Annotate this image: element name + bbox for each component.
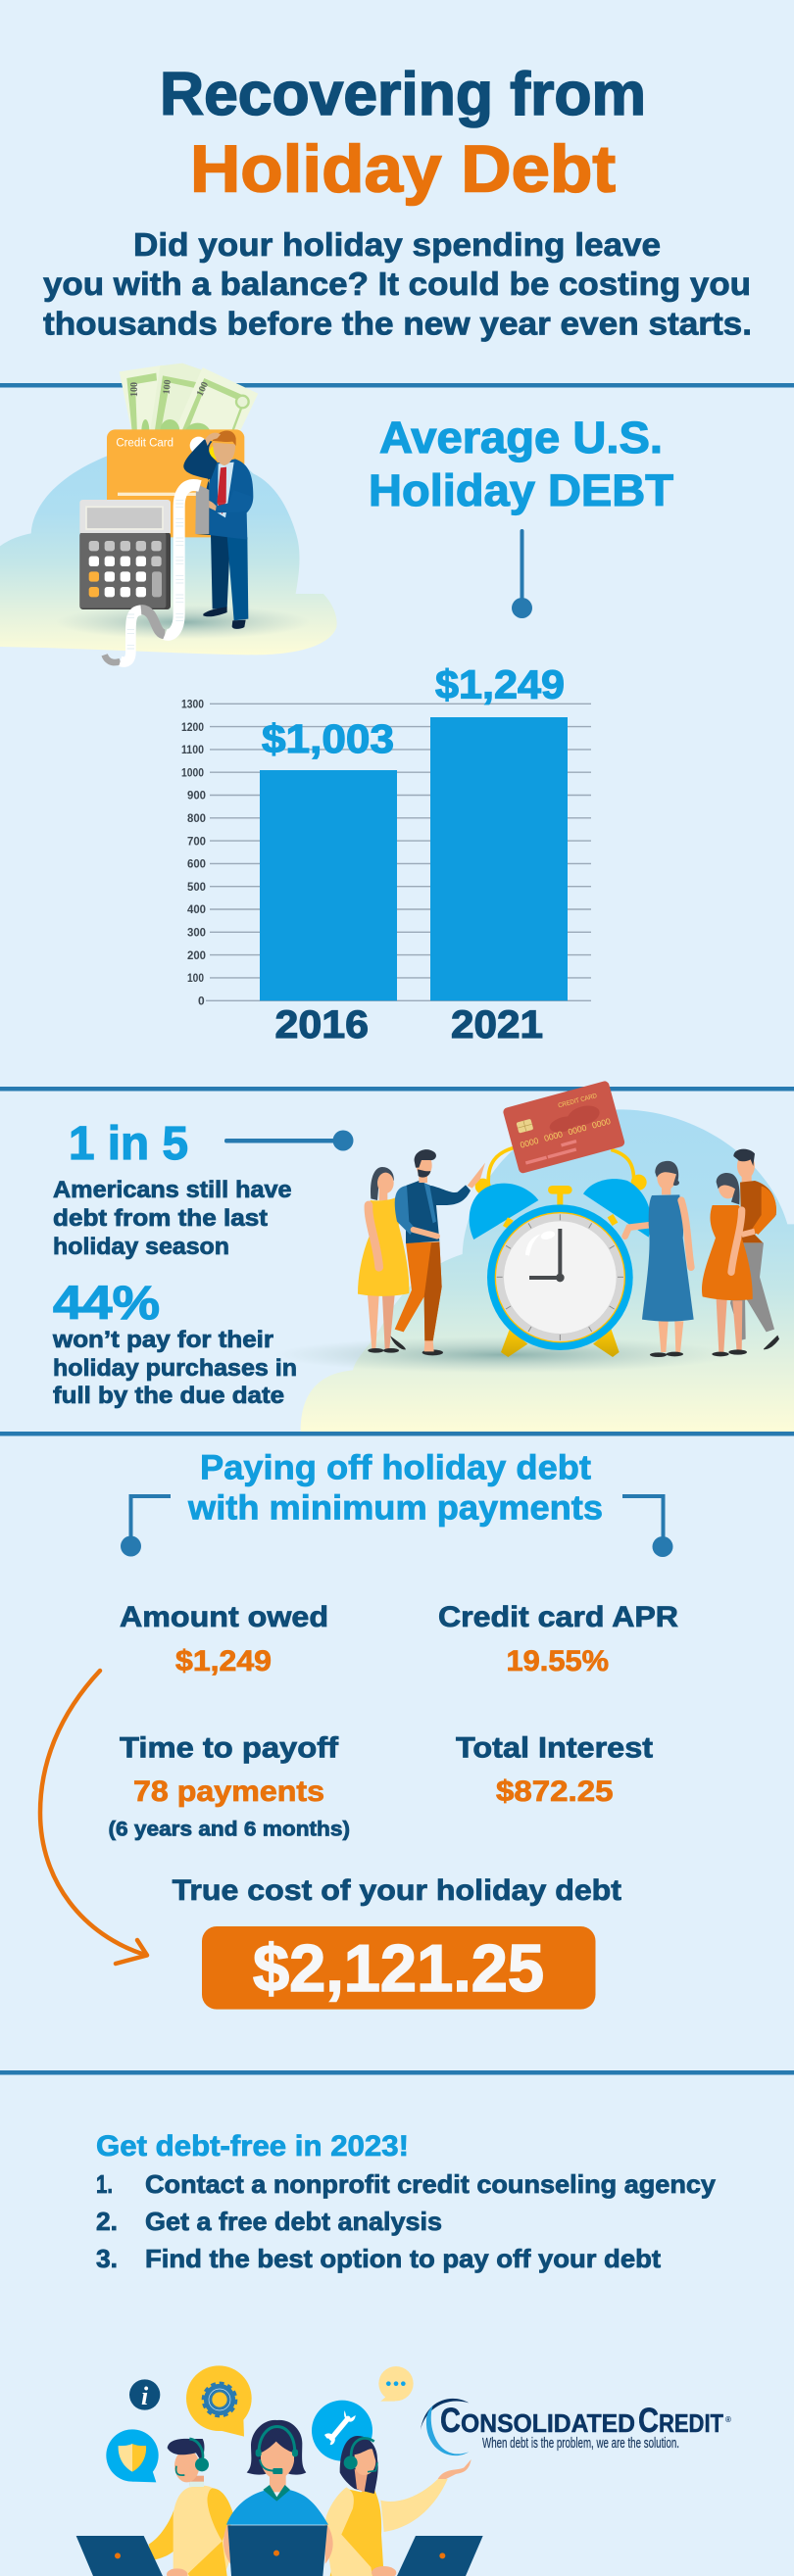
bar 2016 — [260, 770, 397, 1000]
total interest — [456, 1732, 653, 1808]
time to payoff: (6 years and 6 months) — [108, 1819, 350, 1841]
year 2016: 2016 — [274, 1003, 369, 1046]
cloud backdrop — [0, 451, 337, 655]
y axis labels — [181, 698, 206, 1007]
credit card APR — [438, 1601, 678, 1677]
y axis labels: 200 — [187, 948, 206, 962]
amount owed — [120, 1601, 328, 1677]
logo swoosh — [421, 2399, 469, 2455]
right bracket pin — [622, 1496, 672, 1557]
y axis labels: 700 — [187, 834, 206, 848]
logo tagline: When debt is the problem, we are the solution. — [482, 2435, 679, 2452]
heading: Paying off holiday debt — [200, 1448, 591, 1487]
laptop: center — [227, 2525, 327, 2576]
description: holiday season — [53, 1234, 229, 1260]
total interest: Total Interest — [456, 1732, 653, 1764]
y axis labels: 500 — [187, 880, 206, 894]
bar chart: average holiday debt — [181, 662, 591, 1046]
step 2: Get a free debt analysis — [145, 2207, 442, 2236]
intro text — [43, 226, 752, 341]
logo: Consolidated Credit — [421, 2399, 731, 2455]
y axis labels: 900 — [187, 789, 206, 802]
banknotes: 100 — [162, 379, 174, 395]
heading — [187, 1448, 603, 1527]
panel: paying off with minimum payments — [40, 1448, 678, 2010]
description — [53, 1177, 292, 1260]
illustration: support team with headsets — [76, 2365, 483, 2576]
y axis labels: 1300 — [181, 698, 204, 711]
connector line and dot — [224, 1131, 353, 1150]
person: center agent — [223, 2420, 333, 2564]
credit card: Credit Card — [116, 436, 174, 450]
icon: speech dots — [378, 2366, 414, 2402]
description — [52, 1327, 297, 1409]
heading: Get debt-free in 2023! — [96, 2130, 409, 2163]
description: Americans still have — [53, 1177, 292, 1203]
businessman — [183, 431, 253, 629]
step 1: Contact a nonprofit credit counseling agency — [145, 2169, 717, 2199]
logo wordmark: C — [638, 2402, 659, 2440]
year 2021: 2021 — [451, 1003, 543, 1046]
receipt paper — [105, 483, 209, 662]
logo wordmark: ONSOLIDATED — [461, 2408, 635, 2438]
icon: info — [129, 2379, 160, 2410]
time to payoff — [108, 1732, 350, 1841]
connector pin — [512, 529, 532, 618]
flying credit card: CREDIT CARD — [558, 1093, 598, 1109]
logo wordmark: C — [440, 2402, 461, 2440]
y axis labels: 100 — [187, 971, 204, 985]
title line 1: Recovering from — [160, 61, 646, 128]
calculator — [79, 500, 171, 609]
heading: Average U.S. Holiday DEBT: Holiday DEBT — [369, 465, 673, 515]
person: couple embracing — [702, 1149, 779, 1356]
y axis labels: 1200 — [181, 720, 204, 734]
credit card APR: Credit card APR — [438, 1601, 678, 1633]
heading: with minimum payments — [187, 1489, 603, 1527]
bar 2021 — [430, 717, 568, 1000]
y axis labels: 1000 — [181, 765, 204, 779]
logo wordmark: REDIT — [659, 2408, 723, 2438]
step 2: 2. — [96, 2207, 118, 2236]
laptop: left — [76, 2536, 163, 2576]
y axis labels: 300 — [187, 925, 206, 939]
curved arrow — [40, 1671, 147, 1964]
heading: Average U.S. Holiday DEBT — [369, 413, 673, 515]
amount owed: Amount owed — [120, 1601, 328, 1633]
intro text: Did your holiday spending leave — [133, 226, 661, 263]
flying credit card: 0000 — [543, 1129, 564, 1143]
step 3: 3. — [96, 2244, 118, 2273]
banknotes: 100 — [129, 382, 140, 397]
icon: wrench bubble — [312, 2401, 372, 2461]
person: bearded man pointing — [390, 1149, 485, 1355]
banknotes: 100 — [195, 380, 211, 398]
big number: 44% — [53, 1278, 160, 1330]
ground shadow — [56, 606, 311, 639]
icon: info: i — [141, 2382, 149, 2410]
heading: Average U.S. Holiday DEBT: Average U.S. — [379, 413, 663, 462]
y axis labels: 0 — [198, 994, 205, 1007]
panel: get debt-free steps — [96, 2130, 717, 2273]
title line 2: Holiday Debt — [190, 131, 616, 206]
intro text: thousands before the new year even starts. — [43, 306, 752, 341]
big number: 1 in 5 — [69, 1118, 188, 1170]
flying credit card: 0000 — [591, 1116, 612, 1131]
stat: 1 in 5 — [53, 1118, 353, 1260]
icon: shield bubble — [106, 2429, 159, 2482]
total interest: $872.25 — [496, 1775, 614, 1808]
step 3: Find the best option to pay off your debt — [145, 2244, 661, 2273]
flying credit card — [502, 1080, 625, 1174]
credit card APR: 19.55% — [506, 1645, 609, 1677]
flying credit card: 0000 — [519, 1136, 540, 1150]
true cost box — [202, 1926, 596, 2010]
logo wordmark — [440, 2402, 731, 2440]
y axis labels: 1100 — [181, 743, 204, 756]
description: debt from the last — [53, 1205, 268, 1232]
amount owed: $1,249 — [175, 1645, 272, 1677]
icon: gear bubble — [186, 2365, 252, 2437]
banknotes — [120, 364, 258, 446]
logo wordmark: ® — [725, 2415, 731, 2424]
time to payoff: 78 payments — [133, 1775, 324, 1808]
section dividers — [0, 383, 794, 2075]
flying credit card: 0000 — [567, 1123, 588, 1137]
cloud backdrop — [301, 1109, 794, 1432]
description: won’t pay for their — [52, 1327, 273, 1353]
step 1: 1. — [96, 2169, 113, 2199]
person: right agent — [325, 2436, 471, 2576]
credit card — [107, 429, 244, 537]
ground shadow — [274, 1337, 732, 1373]
true cost label: True cost of your holiday debt — [173, 1874, 621, 1907]
illustration: people around an alarm clock with a credit card — [274, 1080, 794, 1432]
laptop: right — [397, 2536, 483, 2576]
title — [160, 61, 646, 206]
time to payoff: Time to payoff — [120, 1732, 339, 1764]
y axis labels: 800 — [187, 811, 206, 825]
person: left agent — [149, 2439, 233, 2576]
illustration: man with credit card, calculator and receipt — [0, 364, 337, 662]
alarm clock — [470, 1148, 651, 1357]
stat: 44% — [52, 1278, 297, 1409]
description: holiday purchases in — [53, 1355, 297, 1382]
true cost box: $2,121.25 — [253, 1931, 544, 2006]
person: woman in blue dress — [625, 1161, 694, 1357]
y axis labels: 400 — [187, 902, 206, 916]
value 2021: $1,249 — [435, 662, 565, 707]
person: woman in yellow dress — [358, 1167, 409, 1353]
value 2016: $1,003 — [262, 716, 394, 761]
left bracket pin — [121, 1496, 171, 1556]
description: full by the due date — [53, 1383, 284, 1409]
intro text: you with a balance? It could be costing you — [43, 266, 751, 302]
y axis labels: 600 — [187, 857, 206, 871]
